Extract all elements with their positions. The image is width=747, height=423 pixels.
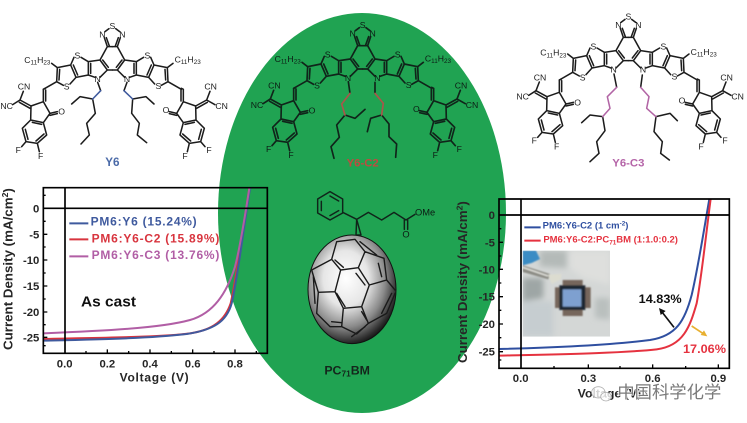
y tick labels: -15: [23, 281, 39, 293]
x tick labels: 0.4: [142, 359, 159, 371]
molecule: Y6-C2: 23: [444, 58, 452, 65]
molecule: Y6-C2: S: [325, 50, 331, 60]
x tick labels: 0.6: [185, 359, 201, 371]
molecule: Y6-C3: S: [580, 72, 586, 82]
arrow: to blue curve: [659, 308, 674, 327]
molecule: Y6-C3: S: [671, 72, 677, 82]
molecule: Y6: CN: [18, 82, 30, 92]
molecule: Y6-C3: [516, 12, 744, 169]
x axis title: Voltage (V): [120, 370, 189, 384]
y axis title: ): [0, 188, 15, 193]
x tick labels: [513, 373, 726, 385]
molecule: Y6: F: [182, 151, 188, 161]
molecule: Y6: CN: [215, 101, 228, 111]
molecule: Y6-C2: S: [395, 50, 401, 60]
annotation: 17.06%: 17.06%: [683, 343, 727, 356]
molecule: Y6: F: [38, 151, 43, 161]
y tick labels: -20: [479, 319, 495, 331]
molecule: Y6: C: [24, 55, 31, 65]
plot frame and axes: [43, 188, 267, 353]
label: PC71BM: PC: [324, 364, 341, 378]
molecule: Y6: S: [144, 51, 150, 61]
plot frame and axes: [499, 199, 729, 368]
label: Y6: Y6: [105, 156, 120, 169]
axis ticks: [499, 229, 718, 368]
x tick labels: 0.0: [513, 373, 529, 385]
molecule: Y6-C3: H: [553, 48, 559, 58]
y tick labels: [23, 203, 39, 344]
molecule: Y6-C3: F: [722, 136, 728, 146]
side chain: [318, 192, 435, 240]
molecule: Y6-C2: CN: [268, 81, 281, 91]
molecule: Y6: H: [37, 55, 43, 65]
molecule: Y6-C2: [251, 20, 478, 170]
legend: PM6:Y6-C3 (13.76%): [92, 248, 219, 262]
y tick labels: -10: [479, 264, 495, 276]
legend: BM (1:1.0:0.2): [616, 234, 678, 245]
molecule: Y6-C3: O: [679, 96, 686, 106]
molecule: Y6-C2: S: [314, 81, 320, 91]
molecule: Y6-C3: H: [703, 47, 710, 57]
molecule: Y6: S: [74, 51, 80, 61]
molecule: Y6-C2: S: [360, 20, 366, 30]
legend: [524, 220, 678, 247]
y tick labels: -5: [485, 237, 495, 249]
x axis title: Voltage (V): [578, 386, 641, 400]
molecule: Y6: N: [119, 29, 125, 39]
y tick labels: -25: [23, 332, 39, 344]
molecule: Y6: S: [64, 82, 70, 92]
molecule: Y6-C2: O: [309, 106, 316, 116]
fullerene cage: [308, 235, 396, 344]
molecule: Y6-C2: F: [266, 144, 271, 154]
chart: 1 cm2 device J-V curves: [455, 199, 729, 403]
annotation: 14.83%: 14.83%: [639, 293, 682, 306]
legend: 71: [609, 240, 617, 247]
molecule: Y6: [0, 21, 228, 169]
molecule: Y6-C2: NC: [251, 100, 263, 110]
molecule: Y6-C2: F: [288, 150, 294, 160]
x tick labels: 0.6: [645, 373, 661, 385]
molecule: Y6: N: [99, 29, 105, 39]
molecule: Y6: C: [175, 54, 181, 64]
molecule: Y6-C2: 11: [431, 58, 438, 65]
y axis title: 2: [0, 192, 10, 197]
molecule: Y6-C2: 23: [294, 59, 301, 66]
molecule: Y6: N: [95, 74, 101, 84]
molecule: Y6: 11: [31, 60, 38, 67]
molecule: Y6-C3: CN: [720, 72, 733, 82]
molecule: Y6-C3: N: [635, 20, 641, 30]
molecule: Y6: H: [187, 54, 194, 64]
molecule: Y6-C3: N: [615, 20, 621, 30]
x tick labels: 0.8: [227, 359, 243, 371]
molecule: Y6-C2: C: [425, 53, 431, 63]
y tick labels: -25: [479, 347, 495, 359]
molecule: Y6-C3: F: [554, 142, 559, 152]
axis ticks: [43, 195, 256, 353]
molecule: PC71BM fullerene: [308, 192, 435, 379]
molecule: Y6-C3: N: [611, 65, 617, 75]
y tick labels: -15: [479, 292, 495, 304]
label: Y6-C2: Y6-C2: [347, 158, 379, 170]
x tick labels: 0.0: [57, 359, 73, 371]
green ellipse background: [218, 13, 506, 413]
molecule: Y6-C2: N: [345, 73, 351, 83]
legend: PM6:Y6-C2 (15.89%): [92, 231, 219, 245]
y tick labels: -10: [23, 255, 39, 267]
annotation: As cast: As cast: [81, 294, 136, 310]
side chain: OMe: [415, 207, 435, 217]
molecule: Y6-C3: CN: [731, 92, 744, 102]
y tick labels: 0: [489, 210, 495, 222]
molecule: Y6-C2: N: [370, 28, 376, 38]
molecule: Y6: F: [16, 145, 21, 155]
molecule: Y6-C3: N: [640, 65, 646, 75]
molecule: Y6-C2: F: [457, 144, 462, 154]
molecule: Y6-C2: O: [413, 104, 420, 114]
curve: PM6:Y6: [43, 188, 250, 341]
molecule: Y6-C2: C: [275, 54, 281, 64]
molecule: Y6-C2: N: [350, 28, 356, 38]
molecule: Y6-C3: F: [532, 136, 537, 146]
molecule: Y6-C2: CN: [455, 81, 467, 91]
label: PC71BM: 71: [341, 369, 351, 379]
molecule: Y6-C3: C: [540, 48, 547, 58]
molecule: Y6: O: [163, 105, 170, 115]
watermark icon: [592, 387, 611, 401]
molecule: Y6-C3: 11: [697, 52, 704, 59]
curve: PM6:Y6-C2:PC71BM: [499, 199, 711, 356]
legend: ): [625, 221, 628, 232]
side chain: O: [402, 230, 410, 240]
molecule: Y6: 23: [43, 60, 51, 67]
molecule: Y6-C3: NC: [516, 92, 529, 102]
legend: PM6:Y6 (15.24%): [91, 215, 197, 229]
y tick labels: 0: [33, 203, 39, 215]
molecule: Y6: 23: [194, 59, 201, 66]
label: PC71BM: BM: [351, 364, 370, 378]
molecule: Y6: O: [58, 107, 65, 117]
molecule: Y6-C3: S: [660, 41, 666, 51]
molecule: Y6-C2: 11: [281, 59, 288, 66]
watermark text: 中国科学化学: [617, 378, 721, 403]
molecule: Y6-C3: 23: [559, 52, 567, 59]
legend: PM6:Y6-C2 (1 cm: [543, 221, 620, 232]
molecule: Y6-C3: 11: [547, 52, 554, 59]
molecule: Y6-C3: S: [590, 41, 596, 51]
legend: [69, 215, 219, 262]
curve: PM6:Y6-C2: [43, 188, 249, 339]
molecule: Y6: 11: [181, 59, 188, 66]
molecule: Y6-C3: CN: [534, 72, 546, 82]
y axis title: Current Density (mA/cm: [0, 197, 15, 350]
molecule: Y6: S: [155, 81, 161, 91]
y tick labels: [479, 210, 495, 359]
x tick labels: [57, 359, 243, 371]
molecule: Y6: F: [206, 145, 212, 155]
label: Y6-C3: Y6-C3: [612, 157, 644, 169]
x tick labels: 0.9: [710, 373, 726, 385]
molecule: Y6-C3: O: [574, 97, 581, 107]
arrow: to red curve: [692, 326, 707, 336]
y axis title: 2: [455, 205, 465, 210]
curve: PM6:Y6-C3: [43, 188, 249, 333]
molecule: Y6-C2: F: [433, 150, 438, 160]
inset photo of device: [523, 251, 610, 337]
legend: PM6:Y6-C2:PC: [543, 234, 609, 245]
molecule: Y6: N: [124, 74, 130, 84]
y axis title: Current Density (mA/cm: [455, 210, 470, 363]
molecule: Y6-C3: C: [691, 47, 697, 57]
x tick labels: 0.2: [99, 359, 115, 371]
molecule: Y6: NC: [0, 101, 13, 111]
molecule: Y6-C2: CN: [466, 100, 478, 110]
molecule: Y6: CN: [204, 82, 217, 92]
molecule: Y6-C2: H: [438, 53, 444, 63]
x tick labels: 0.3: [580, 373, 596, 385]
molecule: Y6-C3: F: [698, 142, 704, 152]
molecule: Y6-C2: S: [406, 80, 412, 90]
y tick labels: -5: [29, 229, 39, 241]
molecule: Y6-C2: N: [374, 73, 380, 83]
molecule: Y6-C2: H: [287, 54, 294, 64]
y axis title: ): [455, 201, 470, 206]
molecule: Y6-C3: 23: [710, 52, 717, 59]
molecule: Y6: S: [109, 21, 115, 31]
chart: as-cast J-V curves: [0, 188, 267, 384]
legend: -2: [620, 220, 626, 227]
curve: PM6:Y6-C2 1 cm2: [499, 199, 709, 349]
molecule: Y6-C3: S: [625, 12, 631, 22]
y tick labels: -20: [23, 307, 39, 319]
